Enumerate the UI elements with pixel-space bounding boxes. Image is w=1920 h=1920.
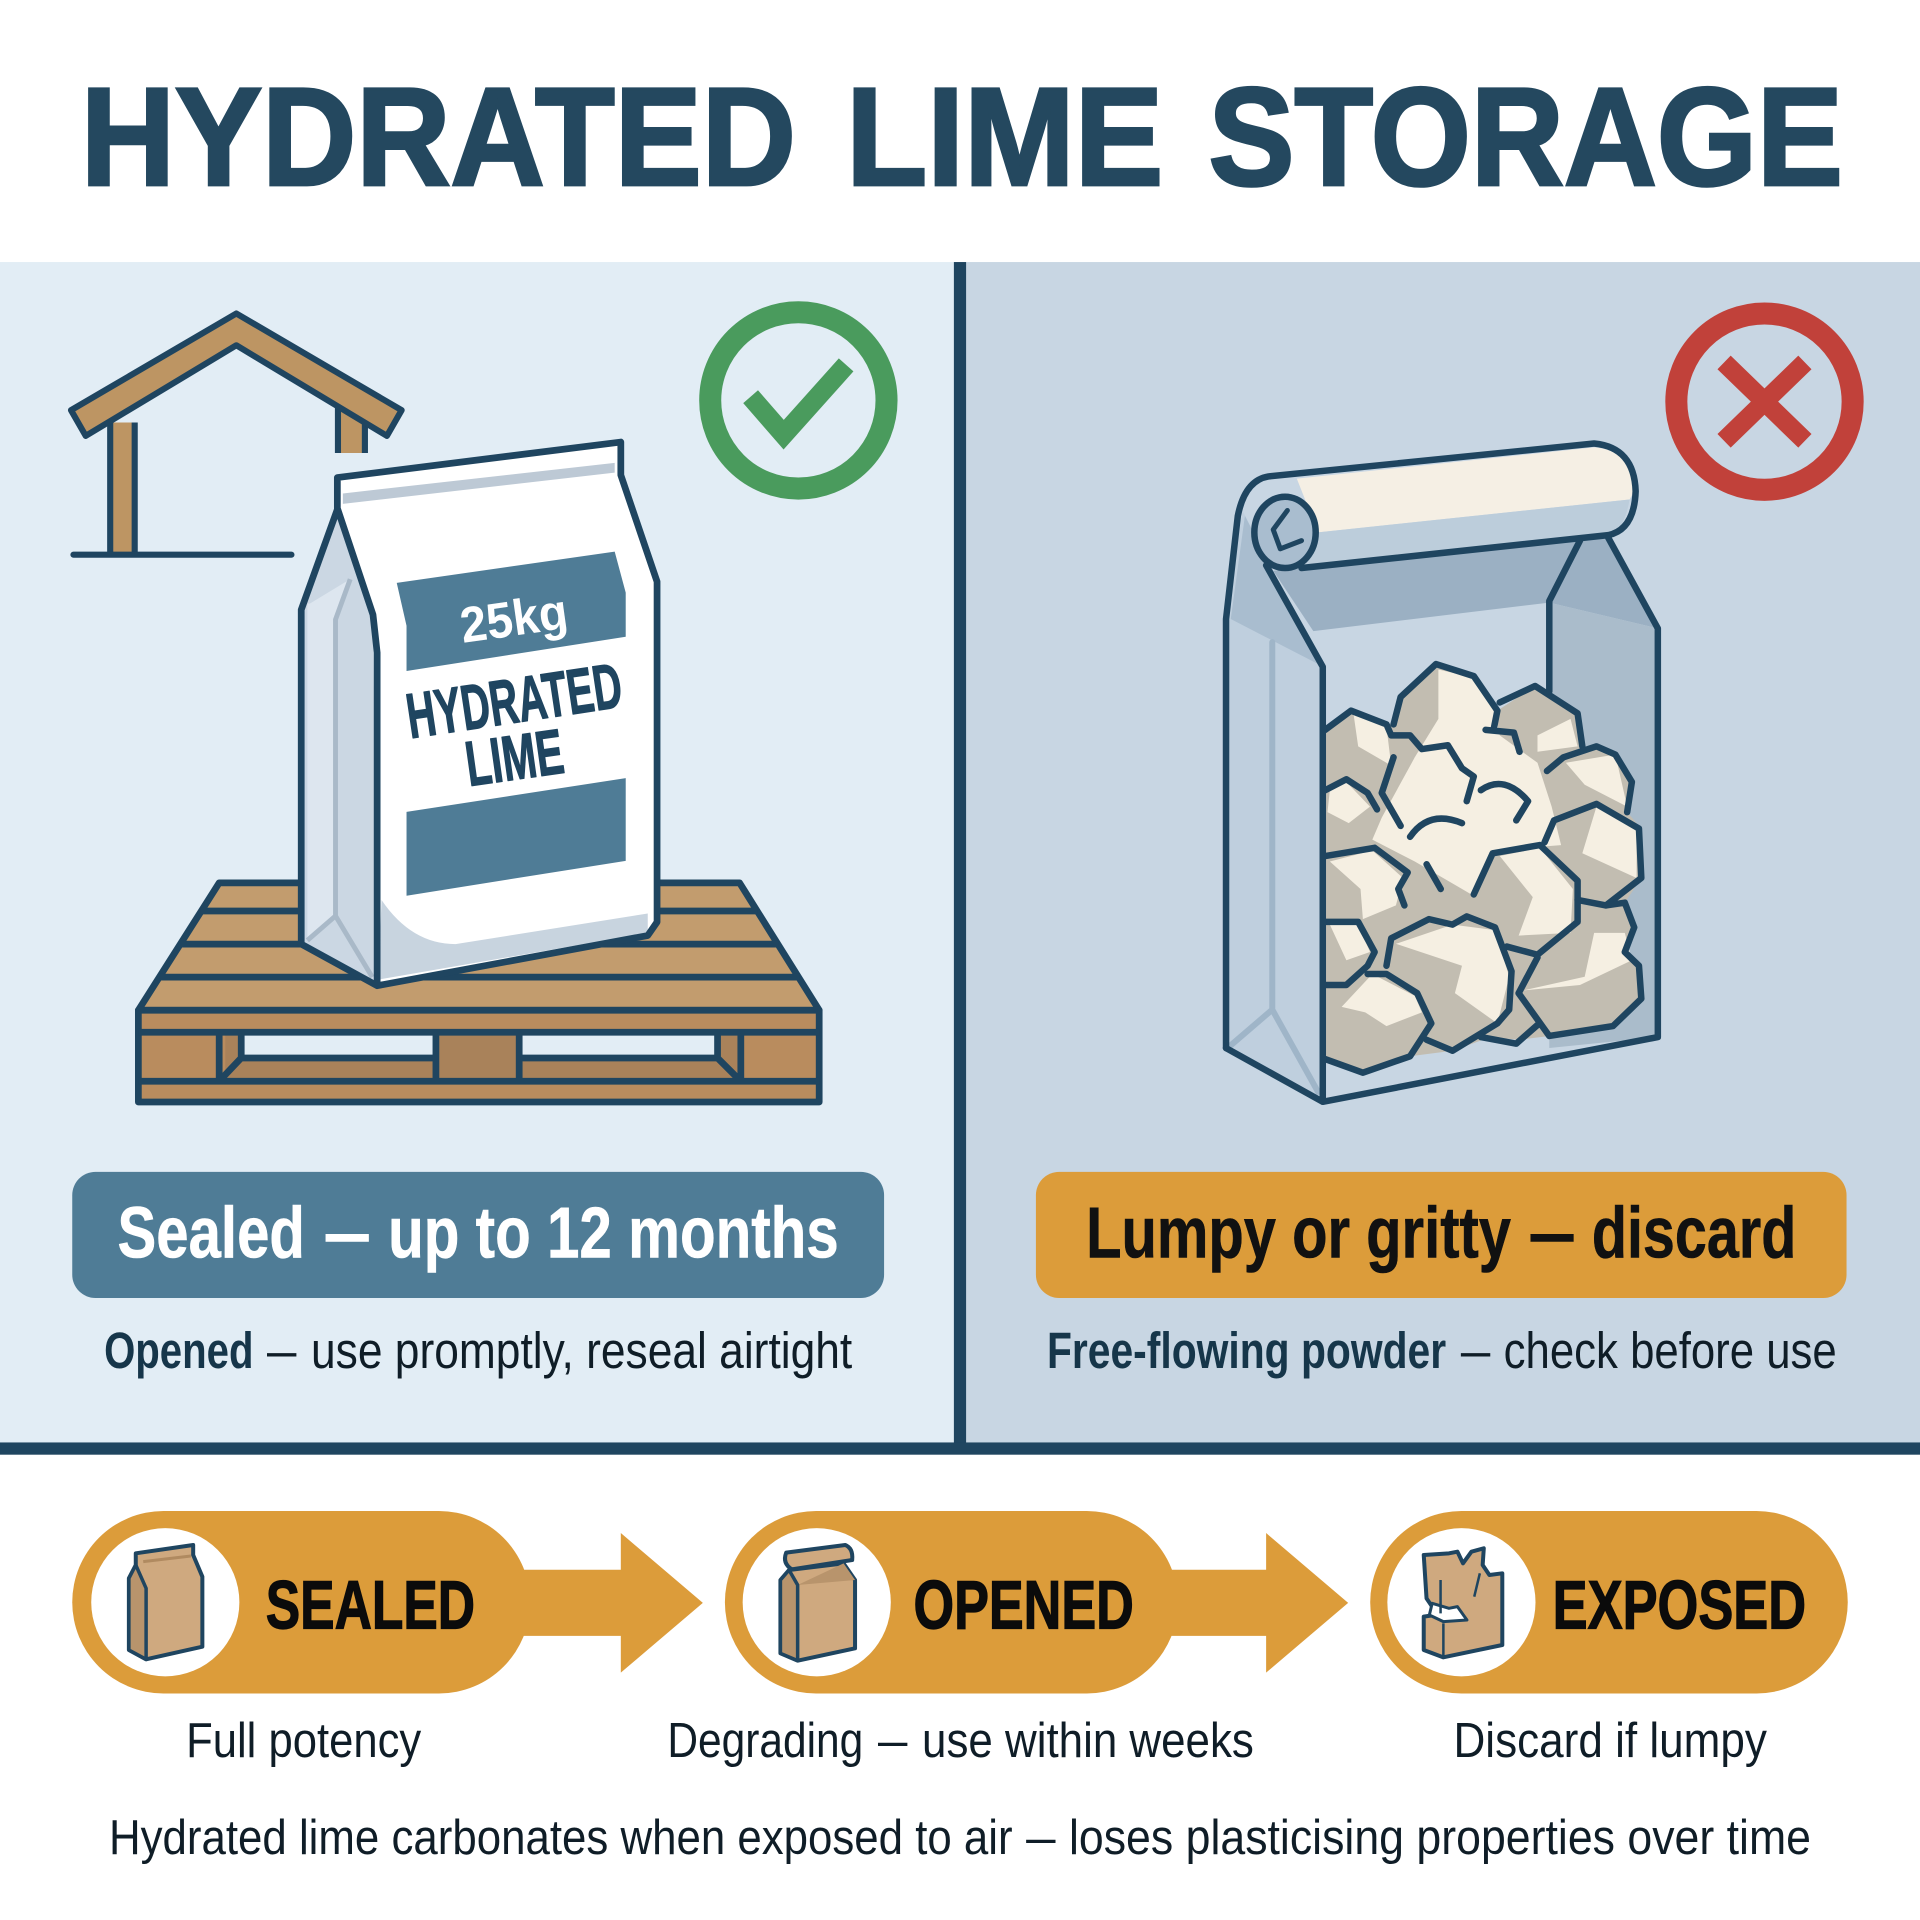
icon: green check bbox=[710, 312, 887, 489]
icon: torn bag bbox=[1424, 1548, 1502, 1657]
status pill: discard: — bbox=[1531, 1194, 1574, 1274]
title bbox=[81, 59, 1843, 215]
status pill: discard bbox=[1036, 1172, 1847, 1298]
bag label: 25kg: 25kg bbox=[457, 583, 571, 654]
bag: 25kg hydrated lime bbox=[301, 442, 657, 987]
captions: Degrading bbox=[667, 1714, 863, 1768]
note: opened: — bbox=[267, 1321, 297, 1379]
bag label: product name bbox=[402, 650, 627, 800]
note: opened bbox=[104, 1321, 852, 1379]
status pill: discard: Lumpy or gritty bbox=[1086, 1194, 1511, 1274]
note: free-flowing powder: Free-flowing powder bbox=[1047, 1321, 1446, 1379]
note: free-flowing powder: check before use bbox=[1504, 1321, 1837, 1379]
panel: bad storage bbox=[966, 262, 1920, 1444]
status pill: sealed: — bbox=[326, 1194, 369, 1274]
footnote: — bbox=[1026, 1811, 1056, 1865]
stage: opened: OPENED bbox=[913, 1567, 1134, 1644]
footnote bbox=[109, 1811, 1811, 1865]
divider: horizontal bbox=[0, 1442, 1920, 1455]
status pill: sealed: up to 12 months bbox=[388, 1194, 839, 1274]
captions: — bbox=[878, 1714, 907, 1768]
note: free-flowing powder bbox=[1047, 1321, 1837, 1379]
icon: sealed bag bbox=[129, 1545, 202, 1659]
status pill: sealed: Sealed bbox=[118, 1194, 305, 1274]
stage: exposed: EXPOSED bbox=[1553, 1567, 1806, 1644]
divider: vertical bbox=[954, 262, 966, 1444]
arrow: sealed to opened bbox=[520, 1533, 703, 1673]
stage: sealed bbox=[72, 1511, 530, 1693]
process flow bbox=[72, 1511, 1848, 1768]
footnote: loses plasticising properties over time bbox=[1069, 1811, 1811, 1865]
icon: red cross bbox=[1676, 313, 1853, 490]
status pill: sealed bbox=[72, 1172, 884, 1298]
captions bbox=[186, 1714, 1767, 1768]
note: opened: Opened bbox=[104, 1321, 253, 1379]
title: HYDRATED bbox=[81, 59, 796, 215]
icon: opened bag bbox=[780, 1545, 855, 1661]
open bag with lumps bbox=[1226, 444, 1658, 1102]
bag label: product name: HYDRATED bbox=[402, 650, 627, 752]
note: opened: use promptly, reseal airtight bbox=[311, 1321, 852, 1379]
captions: Discard if lumpy bbox=[1453, 1714, 1767, 1768]
icon: open shed bbox=[71, 313, 402, 555]
panel: good storage bbox=[0, 262, 954, 1444]
bag label: product name: LIME bbox=[461, 716, 568, 800]
title: LIME bbox=[846, 59, 1163, 215]
wooden pallet bbox=[138, 883, 819, 1102]
captions: Full potency bbox=[186, 1714, 422, 1768]
note: free-flowing powder: — bbox=[1461, 1321, 1491, 1379]
title: STORAGE bbox=[1209, 59, 1843, 215]
arrow: opened to exposed bbox=[1169, 1533, 1348, 1673]
stage: exposed bbox=[1370, 1511, 1848, 1693]
stage: opened bbox=[725, 1511, 1178, 1693]
footnote: Hydrated lime carbonates when exposed to air bbox=[109, 1811, 1013, 1865]
stage: sealed: SEALED bbox=[266, 1567, 475, 1644]
captions: use within weeks bbox=[922, 1714, 1254, 1768]
status pill: discard: discard bbox=[1592, 1194, 1796, 1274]
